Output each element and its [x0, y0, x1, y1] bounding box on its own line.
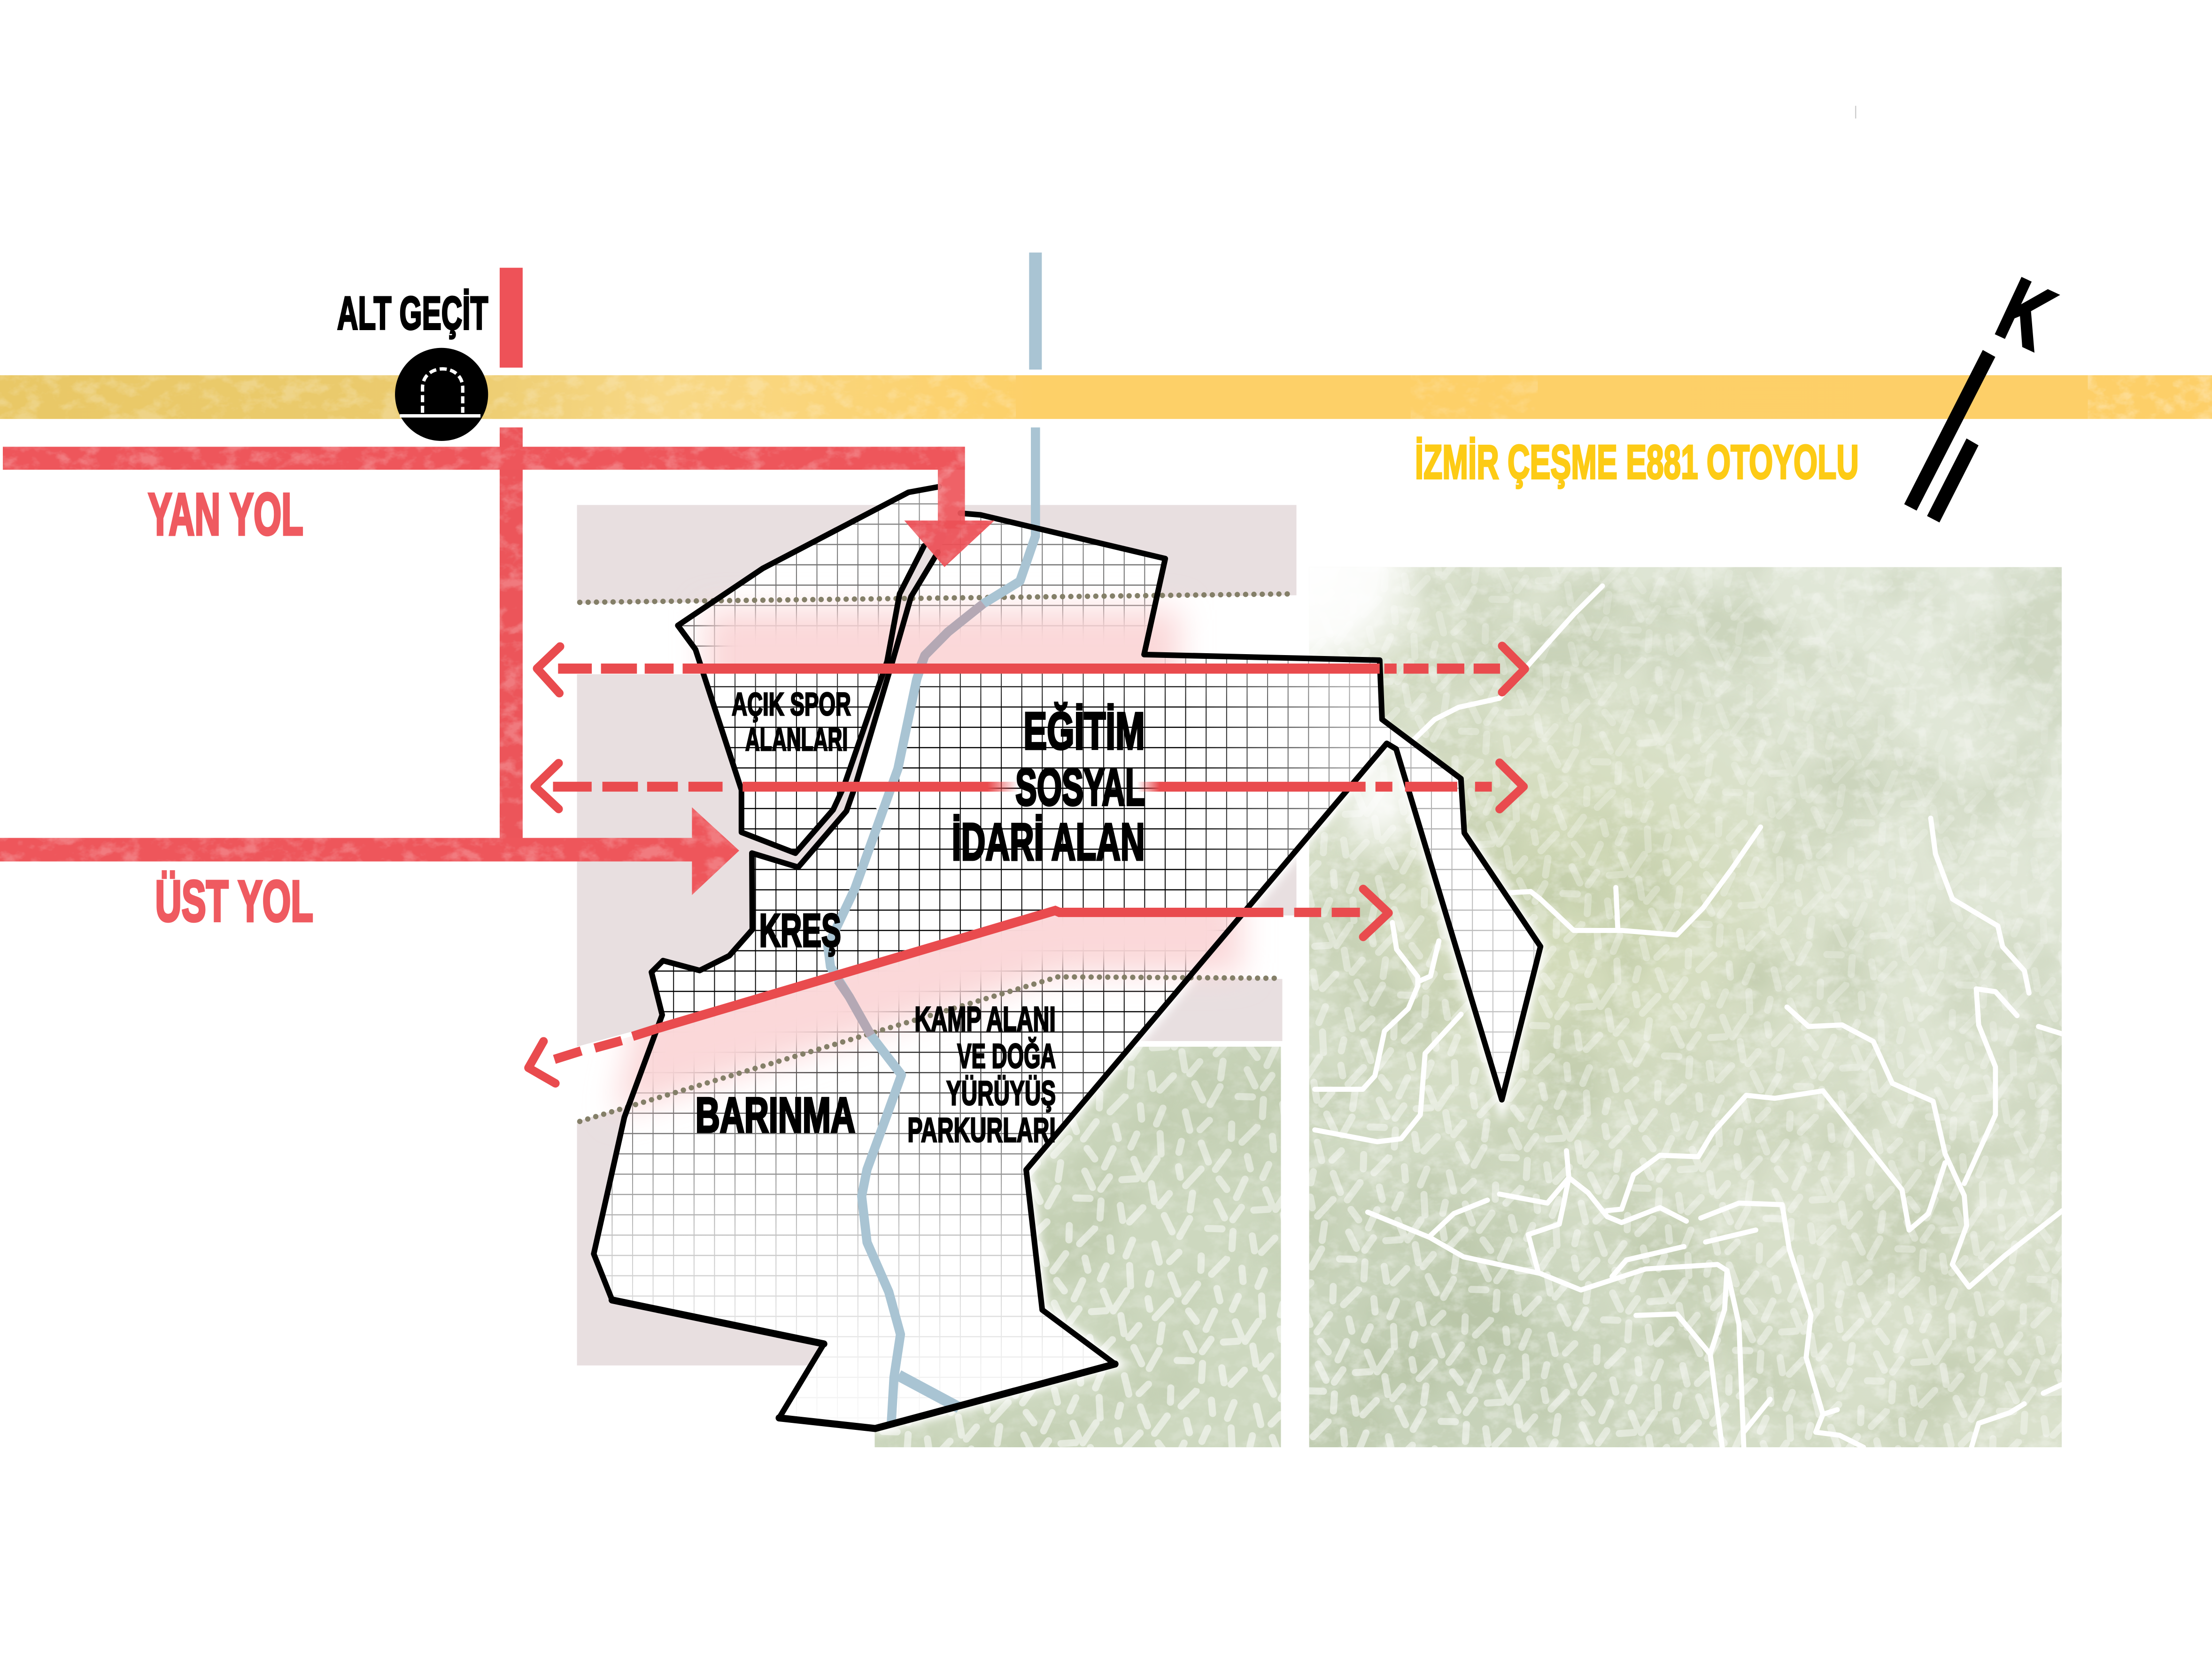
- label: barinma: BARINMA: [696, 1088, 855, 1143]
- label: egitim sosyal idari alan: İDARİ ALAN: [952, 812, 1145, 871]
- label: alt gecit: ALT GEÇİT: [337, 287, 488, 340]
- pink circulation glow bands: [615, 610, 1241, 1114]
- white trails in the forest: [1315, 586, 2063, 1447]
- corridor between sport area and main site: [833, 546, 938, 811]
- label: kamp alani ve doga yuruyus parkurlari: KAMP ALANI: [914, 999, 1056, 1038]
- road: side connector and arrows: [0, 423, 1016, 903]
- panel: site plan with grid: [565, 465, 1580, 1453]
- circulation arrow 3: [528, 889, 1389, 1083]
- label: ust yol: ÜST YOL: [155, 870, 313, 934]
- tunnel icon: [395, 348, 488, 441]
- label: acik spor alanlari: AÇIK SPOR: [732, 686, 851, 722]
- label: kamp alani ve doga yuruyus parkurlari: VE DOĞA: [957, 1036, 1056, 1075]
- label: highway name: İZMİR ÇEŞME E881 OTOYOLU: [1415, 435, 1859, 489]
- panel: small green area: [874, 1047, 1281, 1447]
- panel: large green forest area: [1284, 567, 2062, 1481]
- circulation arrow 1: [537, 646, 1525, 693]
- label: egitim sosyal idari alan: SOSYAL: [1015, 758, 1145, 817]
- label: kamp alani ve doga yuruyus parkurlari: YÜRÜYÜŞ: [946, 1073, 1056, 1112]
- label: acik spor alanlari: [732, 686, 851, 757]
- small tick mark: [1855, 106, 1856, 118]
- river: [828, 253, 1036, 1423]
- circulation arrow 2: [534, 763, 1524, 809]
- label: egitim sosyal idari alan: [952, 702, 1145, 871]
- label: kres: KREŞ: [759, 905, 841, 957]
- panel: mauve site context: [577, 505, 1297, 1366]
- north arrow: K: [1985, 260, 2067, 368]
- road: alt gecit vertical: [500, 268, 523, 368]
- site boundary outline: [594, 486, 1540, 1428]
- north arrow: [1904, 260, 2067, 523]
- pink glow over sport area: [705, 610, 1179, 719]
- label: egitim sosyal idari alan: EĞİTİM: [1023, 702, 1145, 760]
- highway: [0, 375, 2212, 419]
- site halo: [875, 743, 1540, 1428]
- label: kamp alani ve doga yuruyus parkurlari: [907, 999, 1056, 1150]
- label: kamp alani ve doga yuruyus parkurlari: PARKURLARI: [907, 1111, 1056, 1150]
- label: acik spor alanlari: ALANLARI: [745, 721, 848, 757]
- label: yan yol: YAN YOL: [148, 481, 303, 547]
- dotted topography lines: [580, 594, 1292, 1121]
